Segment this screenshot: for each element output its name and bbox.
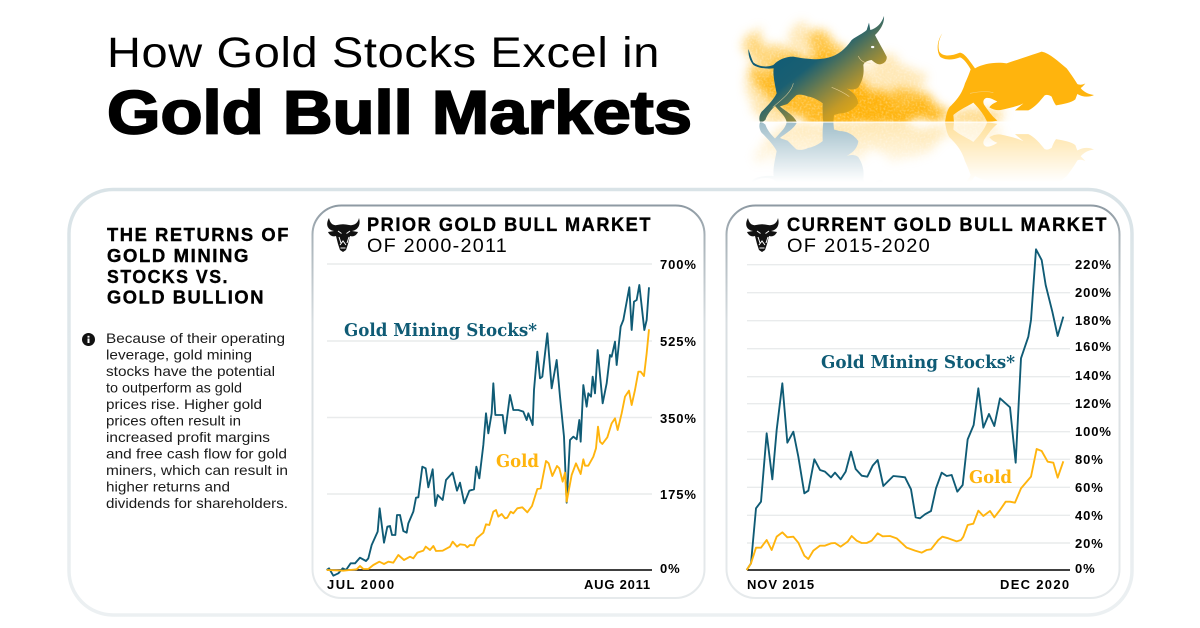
y axis labels: 200%	[1075, 285, 1112, 300]
icon: bull head	[327, 218, 360, 252]
y axis labels: 60%	[1075, 480, 1104, 495]
body text: prices rise. Higher gold	[106, 396, 262, 412]
illustration: bulls with gold dust	[736, 16, 1094, 177]
y axis labels: 100%	[1075, 424, 1112, 439]
title: How Gold Stocks Excel in	[107, 29, 660, 77]
body text: miners, which can result in	[106, 462, 288, 478]
series: gold	[327, 329, 649, 571]
panel heading	[367, 215, 652, 257]
x axis labels: AUG 2011	[584, 577, 651, 592]
y axis labels: 160%	[1075, 339, 1112, 354]
series: gold mining stocks	[327, 285, 649, 576]
reflection of bulls	[752, 122, 1094, 177]
y axis labels: 20%	[1075, 536, 1104, 551]
y axis labels: 180%	[1075, 313, 1112, 328]
icon: info	[82, 333, 95, 346]
heading: returns of gold mining stocks: STOCKS VS.	[107, 266, 229, 287]
label: gold mining stocks: Gold Mining Stocks*	[344, 320, 538, 341]
heading: returns of gold mining stocks: THE RETURNS OF	[107, 224, 290, 245]
series: gold mining stocks	[747, 249, 1063, 570]
x axis labels: JUL 2000	[327, 577, 395, 592]
x axis labels: NOV 2015	[747, 577, 815, 592]
outer panel	[69, 190, 1132, 615]
line chart: 2015-2020	[747, 249, 1112, 592]
y axis labels: 40%	[1075, 508, 1104, 523]
y axis labels: 120%	[1075, 396, 1112, 411]
label: gold: Gold	[496, 451, 539, 472]
title	[107, 29, 692, 146]
panel: current gold bull market	[726, 206, 1120, 598]
left text column	[82, 224, 290, 511]
body text: and free cash flow for gold	[106, 446, 287, 462]
icon: bull head	[746, 218, 779, 252]
bull details	[773, 56, 993, 107]
x axis labels	[327, 577, 651, 592]
panel heading	[787, 215, 1108, 257]
y axis labels: 220%	[1075, 257, 1112, 272]
y axis labels: 175%	[660, 487, 697, 502]
y axis labels	[660, 257, 697, 576]
series: gold	[747, 449, 1063, 570]
heading: returns of gold mining stocks: GOLD MINING	[107, 245, 250, 266]
panel: prior gold bull market	[312, 206, 704, 598]
heading: returns of gold mining stocks	[107, 224, 290, 308]
heading: returns of gold mining stocks: GOLD BULLION	[107, 286, 265, 308]
y axis labels: 0%	[1075, 561, 1096, 576]
label: gold mining stocks: Gold Mining Stocks*	[821, 352, 1016, 373]
body text: Because of their operating	[106, 330, 285, 346]
panel heading: PRIOR GOLD BULL MARKET	[367, 215, 652, 236]
x axis labels: DEC 2020	[1000, 577, 1070, 592]
y axis labels: 140%	[1075, 368, 1112, 383]
title: Gold Bull Markets	[107, 78, 692, 146]
x axis labels	[747, 577, 1070, 592]
line chart: 2000-2011	[327, 257, 697, 592]
y axis labels: 350%	[660, 411, 697, 426]
body text: prices often result in	[106, 412, 241, 428]
panel heading: OF 2000-2011	[367, 236, 508, 257]
body text: stocks have the potential	[106, 363, 275, 379]
y axis labels: 80%	[1075, 452, 1104, 467]
label: gold: Gold	[969, 467, 1012, 488]
y axis labels: 700%	[660, 257, 697, 272]
body text: higher returns and	[106, 478, 230, 494]
panel heading: CURRENT GOLD BULL MARKET	[787, 215, 1108, 236]
y axis labels: 525%	[660, 334, 697, 349]
body text: to outperform as gold	[106, 380, 242, 396]
body text: leverage, gold mining	[106, 346, 252, 362]
y axis labels	[1075, 257, 1112, 576]
body text	[106, 330, 288, 511]
body text: increased profit margins	[106, 429, 270, 445]
y axis labels: 0%	[660, 561, 681, 576]
panel heading: OF 2015-2020	[787, 236, 931, 257]
body text: dividends for shareholders.	[106, 495, 288, 511]
